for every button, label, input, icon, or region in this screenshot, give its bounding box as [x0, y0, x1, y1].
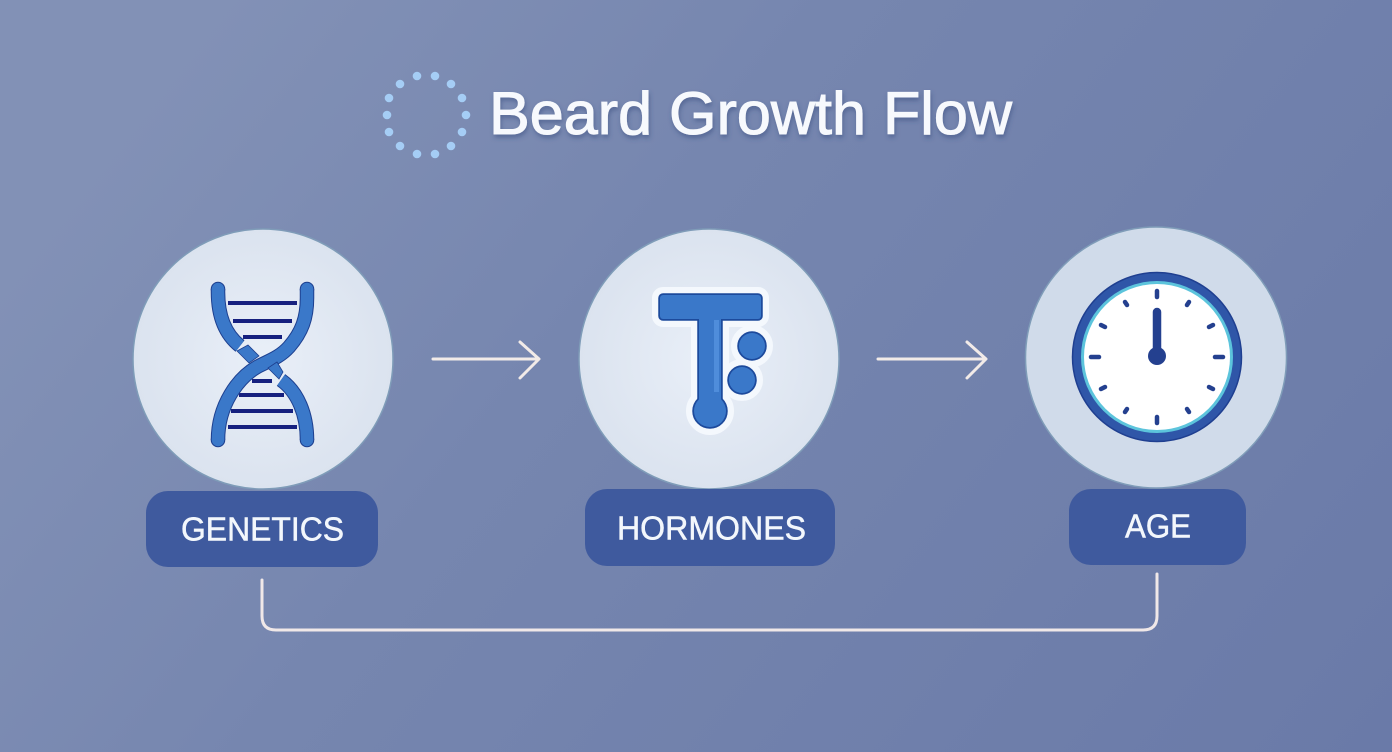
arrow: genetics to hormones [433, 342, 539, 378]
hormones circle [579, 229, 839, 489]
panel: genetics [133, 229, 393, 567]
icon: testosterone T [659, 294, 766, 428]
feedback connector: genetics to age [262, 574, 1157, 630]
crossing fragments [237, 345, 283, 379]
icon: clock [1072, 272, 1242, 442]
arrow: hormones to age [878, 342, 986, 378]
hormones label [585, 489, 835, 566]
icon: DNA helix [211, 282, 314, 447]
icon: dotted ring [383, 72, 470, 158]
panel: age [1026, 227, 1286, 565]
age circle [1026, 227, 1286, 488]
age label: AGE [1125, 508, 1191, 544]
genetics label [146, 491, 378, 567]
title: Beard Growth Flow [489, 80, 1013, 147]
genetics label: GENETICS [181, 510, 344, 548]
genetics circle [133, 229, 393, 489]
hormones label: HORMONES [617, 510, 806, 546]
panel: hormones [579, 229, 839, 566]
age label [1069, 489, 1246, 565]
